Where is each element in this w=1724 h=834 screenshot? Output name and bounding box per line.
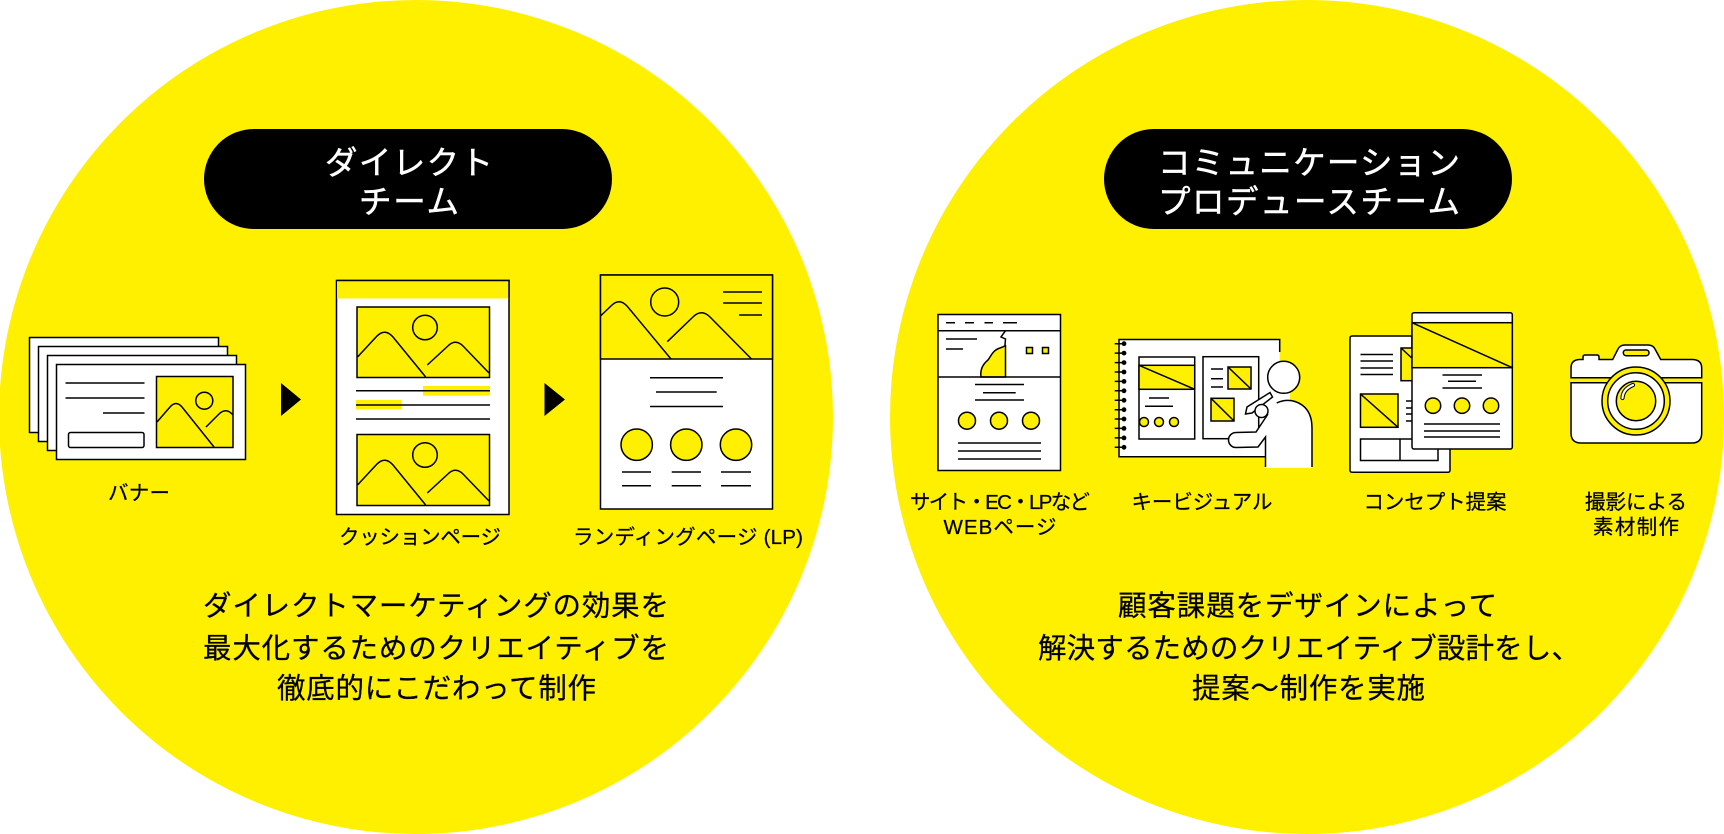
icon: banner stack xyxy=(30,338,246,460)
icon: landing page xyxy=(600,275,772,509)
arrow 2 xyxy=(544,383,565,416)
icon: concept proposal xyxy=(1350,313,1512,472)
label: web page: WEBページ xyxy=(944,516,1056,539)
yellow circle left xyxy=(0,0,833,834)
label: landing page: ランディングページ (LP) xyxy=(573,526,803,549)
description: communication team xyxy=(1038,590,1580,705)
description: communication team: 解決するためのクリエイティブ設計をし、 xyxy=(1038,633,1580,665)
icon: camera xyxy=(1571,345,1702,443)
description: direct team: ダイレクトマーケティングの効果を xyxy=(203,590,669,622)
heading pill: direct team: チーム xyxy=(359,184,459,220)
description: direct team xyxy=(203,590,669,705)
label: cushion page: クッションページ xyxy=(339,526,501,549)
heading pill: communication produce team xyxy=(1104,129,1512,229)
label: key visual: キービジュアル xyxy=(1132,491,1272,514)
label: web page xyxy=(910,491,1090,539)
label: web page: サイト・EC・LPなど xyxy=(910,491,1090,514)
icon: cushion page xyxy=(336,280,509,514)
description: communication team: 提案〜制作を実施 xyxy=(1192,673,1425,705)
label: camera: 撮影による xyxy=(1585,491,1687,514)
label: camera: 素材制作 xyxy=(1593,516,1679,539)
description: direct team: 徹底的にこだわって制作 xyxy=(277,673,596,705)
description: communication team: 顧客課題をデザインによって xyxy=(1118,590,1497,622)
label: banner: バナー xyxy=(108,482,170,505)
heading pill: communication produce team: コミュニケーション xyxy=(1158,145,1460,181)
description: direct team: 最大化するためのクリエイティブを xyxy=(203,633,669,665)
icon: web page xyxy=(938,314,1060,470)
yellow circle right xyxy=(890,0,1724,834)
heading pill: direct team xyxy=(204,129,612,229)
label: concept proposal: コンセプト提案 xyxy=(1364,491,1506,514)
panel: direct team xyxy=(0,0,833,834)
label: camera xyxy=(1585,491,1687,539)
heading pill: communication produce team: プロデュースチーム xyxy=(1158,184,1460,220)
heading pill: direct team: ダイレクト xyxy=(325,145,493,181)
arrow 1 xyxy=(281,383,301,416)
icon: key visual xyxy=(1115,340,1312,468)
panel: communication produce team xyxy=(890,0,1724,834)
